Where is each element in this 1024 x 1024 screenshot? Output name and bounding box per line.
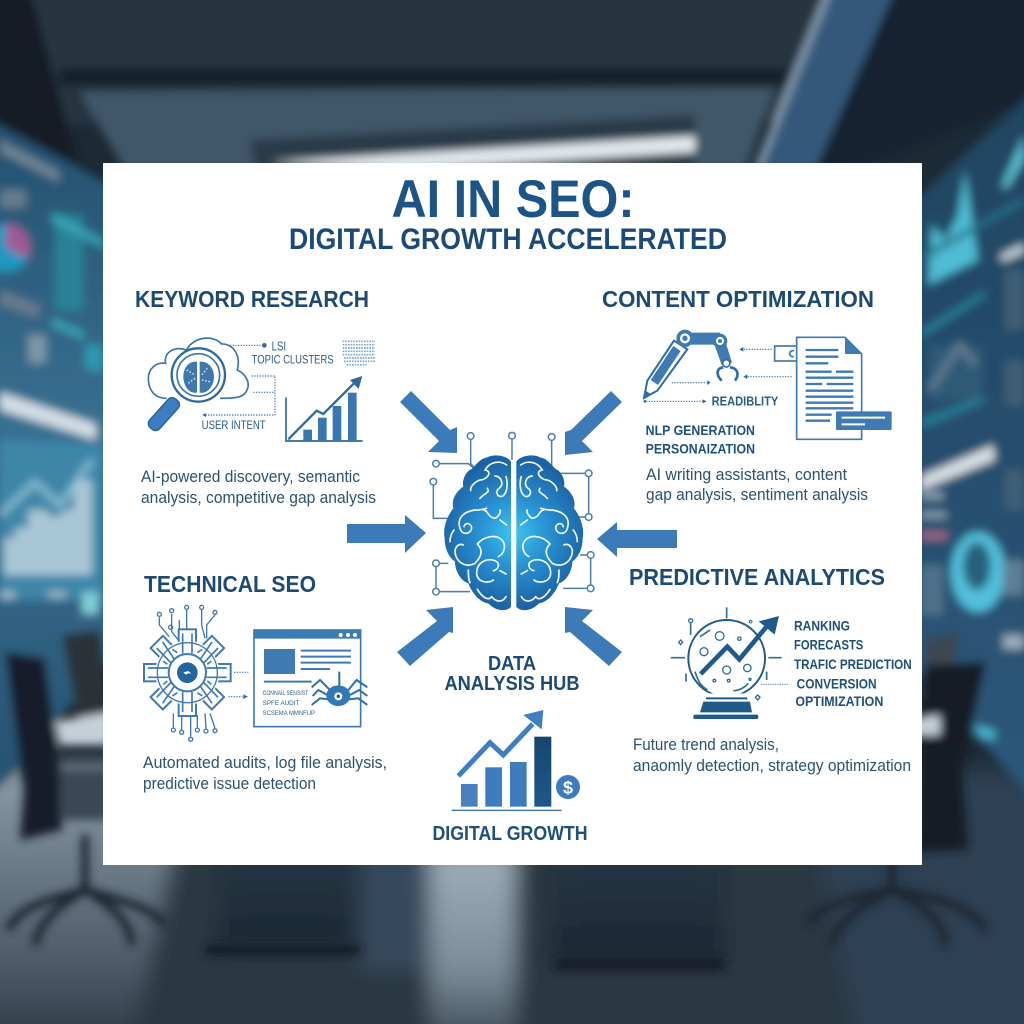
labels: predictive analytics outputs: OPTIMIZATION: [795, 693, 883, 709]
icon: keyword research illustration: [146, 338, 375, 441]
label: personalization: PERSONAIZATION: [646, 440, 755, 456]
chart: digital growth bars: [452, 710, 580, 810]
dotted connectors: [228, 672, 248, 699]
left hemisphere: [444, 455, 511, 610]
label: NLP generation: NLP GENERATION: [646, 422, 755, 438]
arrow: south-west: [397, 607, 453, 666]
heading: content optimization: CONTENT OPTIMIZATION: [602, 286, 874, 312]
right chairs and table: [810, 632, 995, 945]
icon: cloud: [148, 338, 248, 398]
label: data analysis hub: ANALYSIS HUB: [444, 673, 580, 695]
arrow: north-west: [400, 391, 457, 453]
labels: predictive analytics outputs: TRAFIC PREDICTION: [794, 656, 912, 672]
text block: content optimization description: [646, 466, 868, 504]
icon: document: [797, 337, 862, 439]
arrow: east: [597, 522, 677, 557]
icon: spider: [312, 672, 367, 706]
text block: keyword research description: AI-powered discovery, semantic: [141, 468, 360, 486]
labels: predictive analytics outputs: CONVERSION: [797, 676, 877, 692]
left wall screen: [0, 120, 120, 795]
callout card on document: [836, 411, 892, 430]
browser small labels: CONNAIL SENSIST: [263, 690, 308, 697]
text block: keyword research description: [141, 468, 376, 507]
text block: technical SEO description: Automated audits, log file analysis,: [143, 754, 387, 772]
label: topic clusters: TOPIC CLUSTERS: [252, 353, 334, 367]
arrows pointing to the brain: [347, 391, 677, 666]
label: data analysis hub: [444, 653, 580, 695]
labels: predictive analytics outputs: FORECASTS: [794, 636, 863, 652]
text block: predictive analytics description: Future trend analysis,: [633, 736, 779, 754]
arrow: south-east: [565, 607, 622, 666]
label: user intent: USER INTENT: [202, 418, 266, 432]
icon: predictive analytics illustration: [671, 607, 912, 719]
arrow: west: [347, 515, 426, 553]
icon: central brain with circuit nodes: [430, 432, 594, 610]
title: AI IN SEO:: [392, 170, 634, 229]
white infographic card: [103, 163, 922, 865]
circuit lines: [433, 439, 591, 592]
text block: predictive analytics description: anaomly detection, strategy optimization: [633, 757, 911, 775]
icon: circuit pins: [157, 605, 217, 741]
text block: content optimization description: gap analysis, sentiment analysis: [646, 486, 868, 504]
ceiling: [0, 0, 1024, 170]
icon: robot arm with pencil: [644, 330, 738, 398]
text block: technical SEO description: predictive issue detection: [143, 775, 316, 793]
text block: keyword research description: analysis, competitive gap analysis: [141, 489, 376, 507]
heading: predictive analytics: PREDICTIVE ANALYTICS: [629, 564, 885, 590]
arrow: north-east: [565, 391, 622, 455]
dotted connector to user intent: [202, 376, 275, 417]
chart: rising bars: [286, 376, 363, 441]
label: readability: READIBLITY: [712, 393, 778, 408]
icon: tab behind document: [775, 346, 798, 361]
icon: content optimization illustration: [644, 330, 892, 456]
desk feet: [205, 945, 725, 970]
icon: dollar coin: $: [563, 777, 573, 797]
right hemisphere: [516, 455, 583, 610]
icon: technical SEO illustration: [144, 605, 367, 741]
icon: magnifying glass with brain: [146, 348, 225, 433]
icon: rising arrow: [701, 616, 779, 674]
text block: technical SEO description: [143, 754, 387, 793]
dotted connectors: [644, 347, 792, 403]
right wall screen: [915, 90, 1024, 800]
dotted connector: [761, 683, 788, 686]
label: digital growth: DIGITAL GROWTH: [432, 823, 588, 845]
subtitle: DIGITAL GROWTH ACCELERATED: [289, 223, 727, 256]
label: LSI: LSI: [272, 339, 286, 353]
icon: gear: [144, 629, 231, 716]
browser small labels: [263, 690, 315, 717]
heading: keyword research: KEYWORD RESEARCH: [135, 286, 369, 312]
heading: technical SEO: TECHNICAL SEO: [144, 571, 316, 597]
labels: predictive analytics outputs: [794, 618, 912, 709]
browser small labels: SCSEMA MMNFUP: [263, 710, 315, 717]
labels: predictive analytics outputs: RANKING: [794, 618, 850, 634]
label: data analysis hub: DATA: [488, 653, 536, 675]
text block: content optimization description: AI writing assistants, content: [646, 466, 847, 484]
icon: browser window: [254, 630, 361, 727]
circuit nodes: [430, 432, 594, 595]
dot grid: [343, 341, 375, 365]
browser small labels: SPFE AUDIT: [263, 700, 299, 707]
dotted connector to LSI: [227, 343, 267, 348]
text block: predictive analytics description: [633, 736, 911, 775]
icon: crystal ball: [671, 607, 782, 719]
left chairs and table: [5, 630, 165, 945]
